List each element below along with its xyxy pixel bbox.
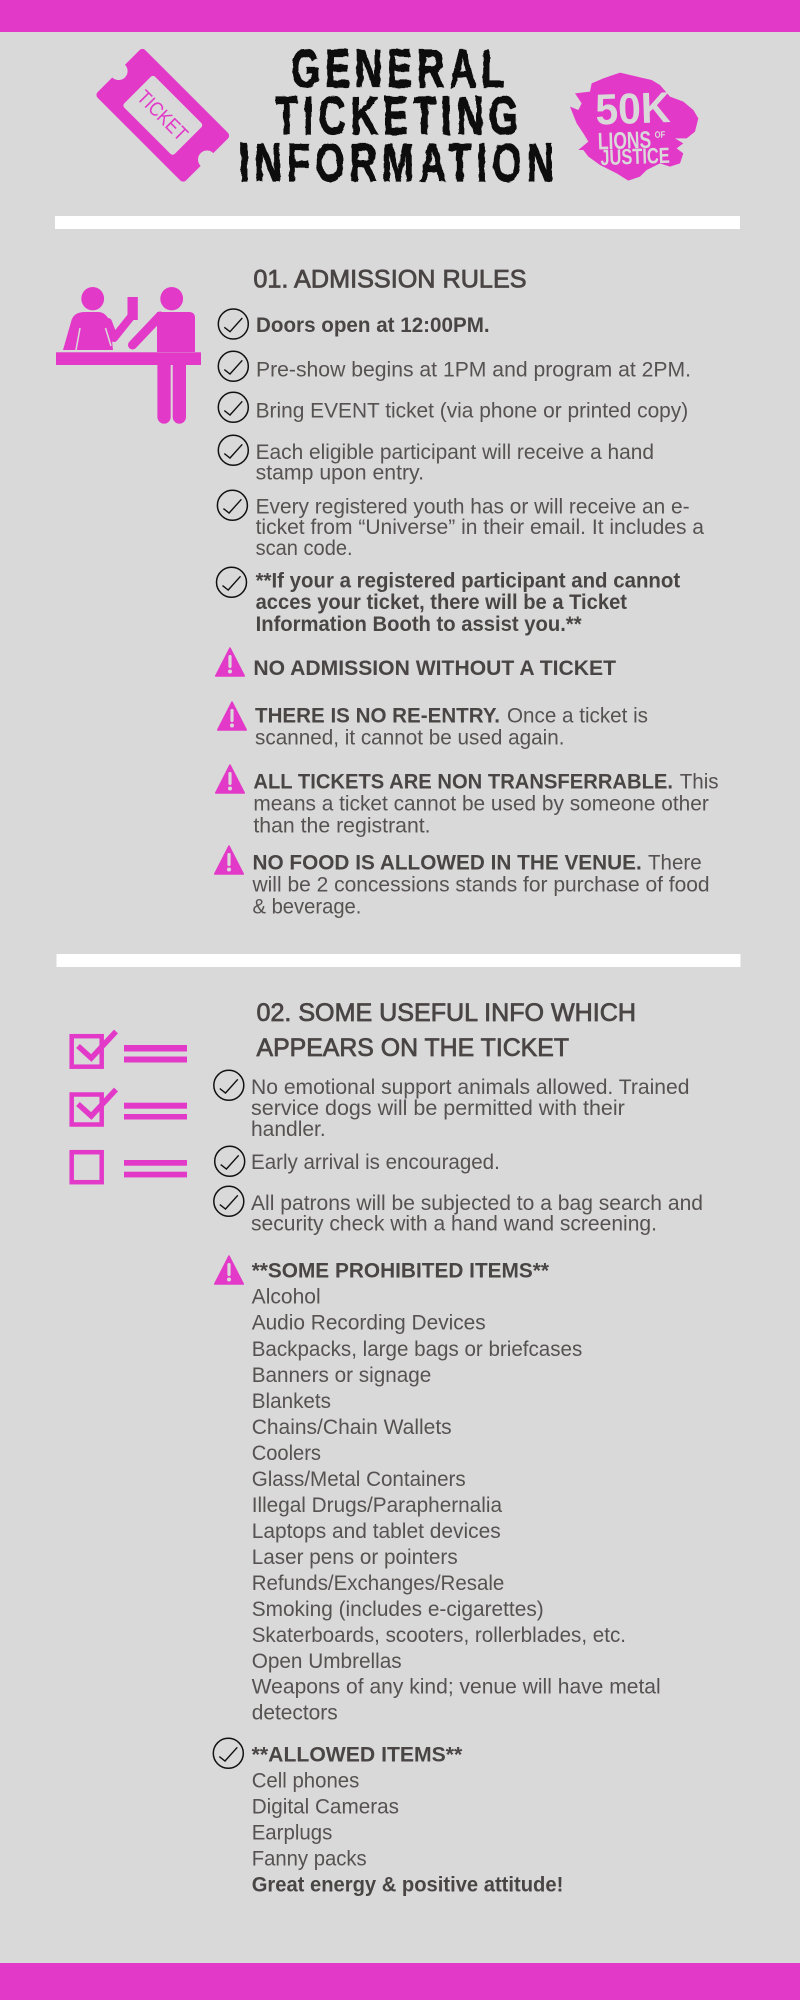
divider bbox=[56, 954, 740, 967]
check item: animals: No emotional support animals allowed. Trained bbox=[251, 1076, 690, 1099]
warning: prohibited items list: Smoking (includes e-cigarettes) bbox=[252, 1598, 544, 1621]
warning: no food: There bbox=[648, 852, 702, 875]
heading: useful info on ticket: APPEARS ON THE TICKET bbox=[256, 1034, 569, 1062]
logo: 50K Lions of Justice: 50K bbox=[595, 84, 671, 135]
check item: animals: handler. bbox=[251, 1118, 326, 1141]
check item: bring ticket: Bring EVENT ticket (via phone or printed copy) bbox=[256, 400, 688, 423]
warning: no admission bbox=[216, 648, 616, 680]
warning: prohibited items list: Laser pens or pointers bbox=[252, 1546, 458, 1569]
check item: doors open bbox=[218, 309, 490, 339]
warning: no food: will be 2 concessions stands for purchase of food bbox=[252, 874, 710, 897]
bottom banner bbox=[0, 1963, 800, 2000]
warning: prohibited items list: Weapons of any kind; venue will have metal bbox=[252, 1676, 661, 1699]
check item: hand stamp bbox=[218, 435, 654, 485]
warning: no re-entry: THERE IS NO RE-ENTRY. bbox=[255, 705, 500, 728]
warning: prohibited items list: Skaterboards, scooters, rollerblades, etc. bbox=[252, 1624, 626, 1647]
warning: prohibited items list: Illegal Drugs/Paraphernalia bbox=[252, 1494, 502, 1517]
warning: no re-entry: scanned, it cannot be used again. bbox=[255, 727, 564, 750]
warning: no food: NO FOOD IS ALLOWED IN THE VENUE. bbox=[252, 852, 642, 875]
check item: information booth: acces your ticket, there will be a Ticket bbox=[256, 591, 627, 614]
check item: allowed items list: **ALLOWED ITEMS** bbox=[252, 1744, 463, 1767]
title: INFORMATION bbox=[239, 133, 559, 193]
check item: early arrival: Early arrival is encouraged. bbox=[251, 1151, 500, 1174]
warning: prohibited items list: Refunds/Exchanges/Resale bbox=[252, 1572, 504, 1595]
check item: e-ticket: Every registered youth has or will receive an e- bbox=[256, 495, 690, 518]
warning: prohibited items list: Blankets bbox=[252, 1390, 331, 1413]
warning: no admission: NO ADMISSION WITHOUT A TICKET bbox=[253, 657, 616, 680]
check item: information booth: **If your a registered participant and cannot bbox=[256, 569, 680, 592]
warning: no food: & beverage. bbox=[252, 896, 361, 919]
heading: 01 admission rules: 01. ADMISSION RULES bbox=[253, 266, 527, 294]
check item: e-ticket bbox=[217, 490, 704, 560]
panel: useful info bbox=[72, 999, 703, 1897]
logo: 50K Lions of Justice bbox=[570, 73, 698, 181]
icon: ticket: TICKET bbox=[132, 86, 192, 146]
warning: prohibited items list: Alcohol bbox=[252, 1286, 321, 1309]
check item: hand stamp: Each eligible participant will receive a hand bbox=[256, 441, 654, 464]
check item: animals: service dogs will be permitted with their bbox=[251, 1097, 625, 1120]
check item: allowed items list: Great energy & positive attitude! bbox=[252, 1874, 563, 1897]
warning: non transferrable: means a ticket cannot be used by someone other bbox=[253, 793, 709, 816]
check item: information booth: Information Booth to assist you.** bbox=[256, 613, 582, 636]
check item: animals bbox=[214, 1070, 690, 1141]
title: TICKETING bbox=[275, 86, 523, 146]
warning: prohibited items list: Chains/Chain Wallets bbox=[252, 1416, 452, 1439]
check item: allowed items list: Fanny packs bbox=[252, 1848, 367, 1871]
warning: no re-entry bbox=[218, 702, 648, 750]
check item: allowed items list: Cell phones bbox=[252, 1770, 359, 1793]
icon: ticket bbox=[95, 47, 231, 183]
warning: prohibited items list: detectors bbox=[252, 1702, 338, 1725]
warning: prohibited items list: Backpacks, large bags or briefcases bbox=[252, 1338, 582, 1361]
warning: non transferrable: ALL TICKETS ARE NON TRANSFERRABLE. bbox=[253, 771, 673, 794]
warning: no re-entry: Once a ticket is bbox=[507, 705, 648, 728]
check item: early arrival bbox=[215, 1146, 500, 1176]
icon: checklist bbox=[72, 1032, 187, 1182]
check item: allowed items list: Earplugs bbox=[252, 1822, 332, 1845]
check item: bag search: security check with a hand wand screening. bbox=[251, 1213, 657, 1236]
warning: prohibited items list: Open Umbrellas bbox=[252, 1650, 402, 1673]
warning: prohibited items list: Banners or signage bbox=[252, 1364, 431, 1387]
check item: information booth bbox=[216, 567, 680, 636]
check item: e-ticket: ticket from “Universe” in their email. It includes a bbox=[256, 516, 704, 539]
check item: pre-show bbox=[218, 351, 691, 382]
panel: admission rules bbox=[56, 266, 719, 919]
check item: e-ticket: scan code. bbox=[256, 537, 353, 560]
check item: bag search bbox=[214, 1186, 703, 1236]
warning: no food bbox=[215, 846, 710, 919]
warning: non transferrable bbox=[216, 765, 719, 838]
top banner bbox=[0, 0, 800, 32]
warning: prohibited items list: **SOME PROHIBITED ITEMS** bbox=[252, 1260, 550, 1283]
check item: bring ticket bbox=[218, 392, 688, 423]
logo: 50K Lions of Justice: LIONS bbox=[597, 127, 652, 156]
title bbox=[239, 39, 559, 193]
check item: pre-show: Pre-show begins at 1PM and program at 2PM. bbox=[256, 359, 691, 382]
heading: useful info on ticket: 02. SOME USEFUL INFO WHICH bbox=[256, 999, 636, 1027]
logo: 50K Lions of Justice: JUSTICE bbox=[600, 143, 670, 170]
check item: doors open: Doors open at 12:00PM. bbox=[256, 314, 490, 337]
icon: ticket check at counter bbox=[56, 287, 201, 424]
heading: useful info on ticket bbox=[256, 999, 636, 1062]
warning: non transferrable: This bbox=[680, 771, 719, 794]
warning: prohibited items list bbox=[215, 1256, 661, 1725]
warning: prohibited items list: Glass/Metal Containers bbox=[252, 1468, 466, 1491]
warning: prohibited items list: Laptops and tablet devices bbox=[252, 1520, 501, 1543]
title: GENERAL bbox=[291, 39, 509, 99]
check item: bag search: All patrons will be subjected to a bag search and bbox=[251, 1192, 703, 1215]
check item: allowed items list: Digital Cameras bbox=[252, 1796, 399, 1819]
warning: prohibited items list: Coolers bbox=[252, 1442, 321, 1465]
logo: 50K Lions of Justice: OF bbox=[654, 130, 666, 140]
check item: hand stamp: stamp upon entry. bbox=[256, 462, 424, 485]
warning: non transferrable: than the registrant. bbox=[253, 815, 431, 838]
divider bbox=[55, 216, 740, 229]
check item: allowed items list bbox=[213, 1738, 563, 1897]
warning: prohibited items list: Audio Recording Devices bbox=[252, 1312, 486, 1335]
